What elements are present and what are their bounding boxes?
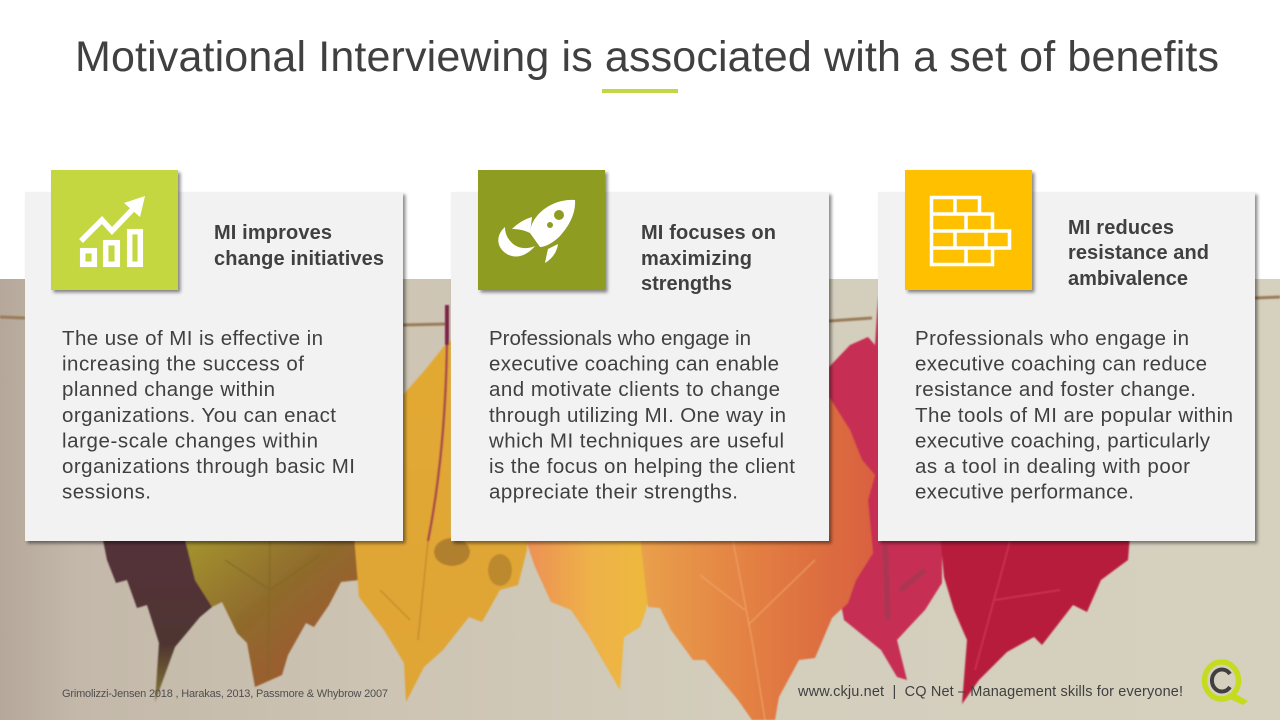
body text: large-scale changes within xyxy=(62,429,318,452)
body text: sessions. xyxy=(62,481,151,504)
body text: planned change within xyxy=(62,378,275,401)
panel: MI focuses on maximizing strengths xyxy=(451,170,829,541)
heading xyxy=(214,222,384,270)
title: Motivational Interviewing is associated with a set of benefits xyxy=(75,33,1219,81)
string xyxy=(0,297,1280,325)
body text: which MI techniques are useful xyxy=(488,429,784,452)
body text xyxy=(62,327,355,504)
heading xyxy=(1068,217,1209,290)
heading: MI improves xyxy=(214,222,332,244)
body text: through utilizing MI. One way in xyxy=(489,404,786,427)
panel: MI improves change initiatives xyxy=(25,170,403,541)
heading: change initiatives xyxy=(214,248,384,270)
body text: Professionals who engage in xyxy=(489,327,751,350)
body text: The use of MI is effective in xyxy=(62,327,323,350)
body text: executive coaching can reduce xyxy=(915,353,1207,376)
leaf: light orange yellow xyxy=(524,535,662,690)
body text xyxy=(915,327,1233,504)
body text: organizations. You can enact xyxy=(62,404,336,427)
body text xyxy=(488,327,795,504)
heading: strengths xyxy=(641,273,732,295)
leaf: orange xyxy=(640,397,875,720)
heading: maximizing xyxy=(641,248,752,270)
leaf: dark purple xyxy=(102,535,225,702)
heading: ambivalence xyxy=(1068,268,1188,290)
body text: executive coaching can enable xyxy=(489,353,779,376)
body text: as a tool in dealing with poor xyxy=(915,455,1190,478)
heading: resistance and xyxy=(1068,242,1209,264)
heading xyxy=(641,222,776,295)
body text: executive coaching, particularly xyxy=(915,429,1211,452)
background photo: autumn leaves on a string xyxy=(0,279,1280,720)
icon: brick wall xyxy=(905,170,1032,290)
body text: and motivate clients to change xyxy=(489,378,780,401)
body text: resistance and foster change. xyxy=(915,378,1196,401)
leaf: yellow xyxy=(354,340,527,702)
footnote: sources: Grimolizzi-Jensen 2018 , Harakas, 2013, Passmore & Whybrow 2007 xyxy=(62,688,388,700)
body text: organizations through basic MI xyxy=(62,455,355,478)
leaf: crimson pink xyxy=(829,295,942,680)
body text: increasing the success of xyxy=(62,353,304,376)
body text: The tools of MI are popular within xyxy=(915,404,1233,427)
body text: Professionals who engage in xyxy=(915,327,1189,350)
heading: MI focuses on xyxy=(641,222,776,244)
body text: executive performance. xyxy=(915,481,1134,504)
body text: appreciate their strengths. xyxy=(489,481,738,504)
icon: CQ logo xyxy=(1204,662,1248,705)
body text: is the focus on helping the client xyxy=(489,455,795,478)
leaf: olive brown xyxy=(184,535,362,687)
heading: MI reduces xyxy=(1068,217,1174,239)
leaf: deep red xyxy=(940,535,1130,704)
icon: growth chart xyxy=(51,170,178,290)
panel: MI reduces resistance and ambivalence xyxy=(878,170,1255,541)
icon: rocket xyxy=(478,170,605,290)
footer tagline: www.ckju.net | CQ Net – Management skills for everyone! xyxy=(797,684,1183,700)
